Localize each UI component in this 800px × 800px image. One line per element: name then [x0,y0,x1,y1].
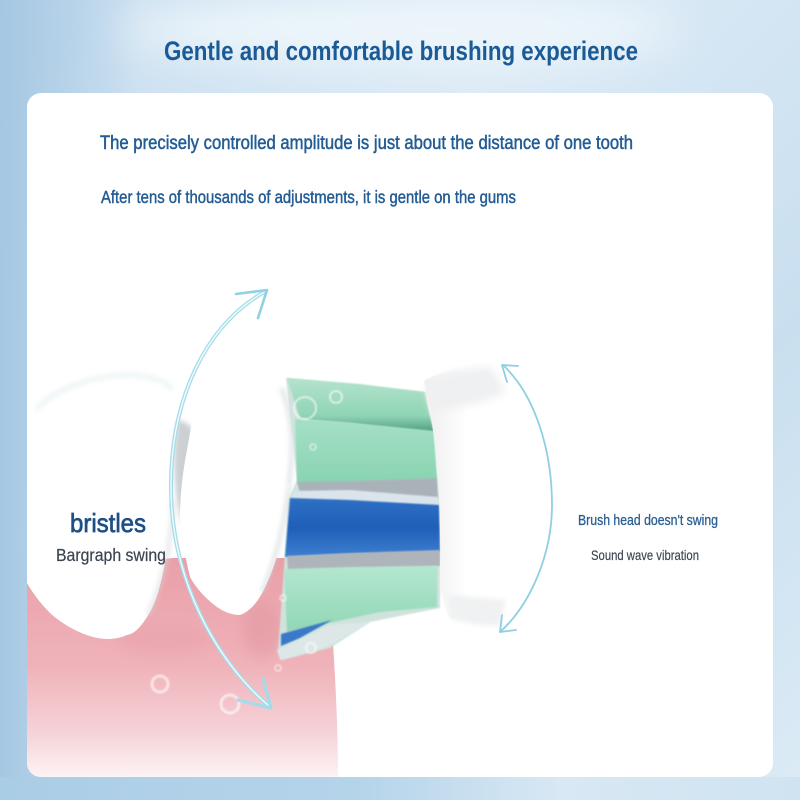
bristle band: upper gray [297,478,438,499]
bristle sheath: translucent bottom [277,622,370,660]
bristle band: lower gray [287,550,440,571]
gum [27,558,338,777]
bristle tuft: upper green [295,419,437,484]
text: gentle on gums: After tens of thousands of adjustments, it is gentle on the gums [101,187,516,207]
panel: white card [27,93,773,777]
title: Gentle and comfortable brushing experience [164,36,638,66]
bristle tuft: blue [285,498,440,557]
label: sound wave vibration: Sound wave vibration [591,547,699,563]
tooth: right [180,383,294,615]
bristle tuft: bottom blue sliver [281,620,332,646]
bristle tuft: lower green [284,566,437,632]
bubbles [152,391,342,713]
brush head bristles [277,378,440,660]
gum shading [246,610,278,655]
tooth gap shadow [173,418,192,522]
arrow: bristle swing arc [171,290,271,708]
label: bargraph swing: Bargraph swing [56,545,166,565]
arrow: brush head arc [500,365,552,632]
bristle backing [278,378,440,660]
bristle band: white line [291,490,439,506]
tooth: left [27,372,182,639]
brush head: white cap [424,368,504,626]
label: bristles: bristles [70,508,146,538]
text: amplitude description: The precisely controlled amplitude is just about the distance of one tooth [100,132,633,154]
label: brush head doesn't swing: Brush head doesn't swing [578,513,718,529]
bristle tuft: top green [287,378,434,432]
